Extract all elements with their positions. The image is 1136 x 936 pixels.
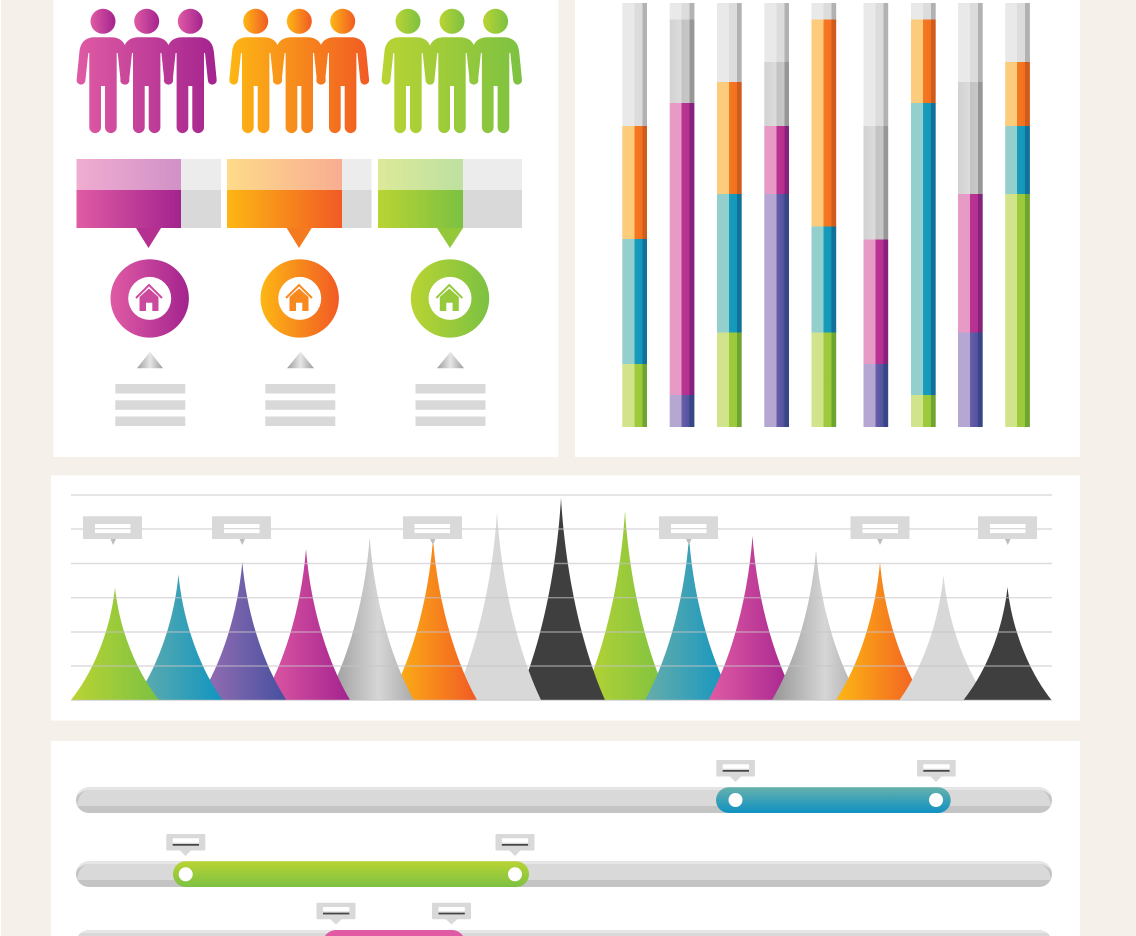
stacked bar 5 <box>812 3 836 427</box>
slider handle label: magenta start <box>316 903 356 924</box>
callout bar: orange <box>227 159 372 248</box>
callout bar: green <box>378 159 522 248</box>
panel: people and home icons <box>54 0 558 457</box>
chart callout 1 <box>83 516 142 545</box>
slider handle label: teal end <box>917 760 956 782</box>
panel: stacked bar chart <box>575 0 1080 457</box>
stacked bar 9 <box>1005 3 1030 427</box>
people group: orange <box>229 9 370 135</box>
left page edge <box>0 0 1 936</box>
peaks <box>71 498 1052 700</box>
panel: peak chart <box>51 476 1080 720</box>
stacked bar 4 <box>764 3 789 427</box>
chart callout 4 <box>659 516 718 545</box>
icon: green home badge <box>411 259 489 338</box>
slider 3: magenta range <box>76 903 1052 936</box>
stacked bar 6 <box>864 3 888 427</box>
icon: orange home badge <box>260 259 339 338</box>
slider 1: teal range <box>76 760 1052 813</box>
chart callout 6 <box>978 516 1037 545</box>
slider handle label: magenta end <box>432 903 471 924</box>
text placeholder: column 2 <box>265 352 335 426</box>
icon: magenta home badge <box>110 259 189 338</box>
slider 2: green range <box>76 834 1052 887</box>
text placeholder: column 3 <box>416 352 486 426</box>
chart callout 2 <box>212 516 271 545</box>
slider handle label: green end <box>496 834 534 856</box>
callout bar: magenta <box>76 159 221 248</box>
slider handle label: teal start <box>716 760 755 782</box>
people group: magenta <box>76 9 218 135</box>
stacked bar 1 <box>622 3 647 427</box>
panel: range sliders <box>51 741 1080 936</box>
slider handle label: green start <box>166 834 205 856</box>
stacked bar 2 <box>670 3 694 427</box>
people group: green <box>381 9 523 135</box>
stacked bar 8 <box>958 3 983 427</box>
stacked bar 7 <box>911 3 936 427</box>
chart callout 3 <box>403 516 462 545</box>
stacked bar 3 <box>717 3 742 427</box>
text placeholder: column 1 <box>115 352 185 426</box>
chart callout 5 <box>850 516 910 545</box>
